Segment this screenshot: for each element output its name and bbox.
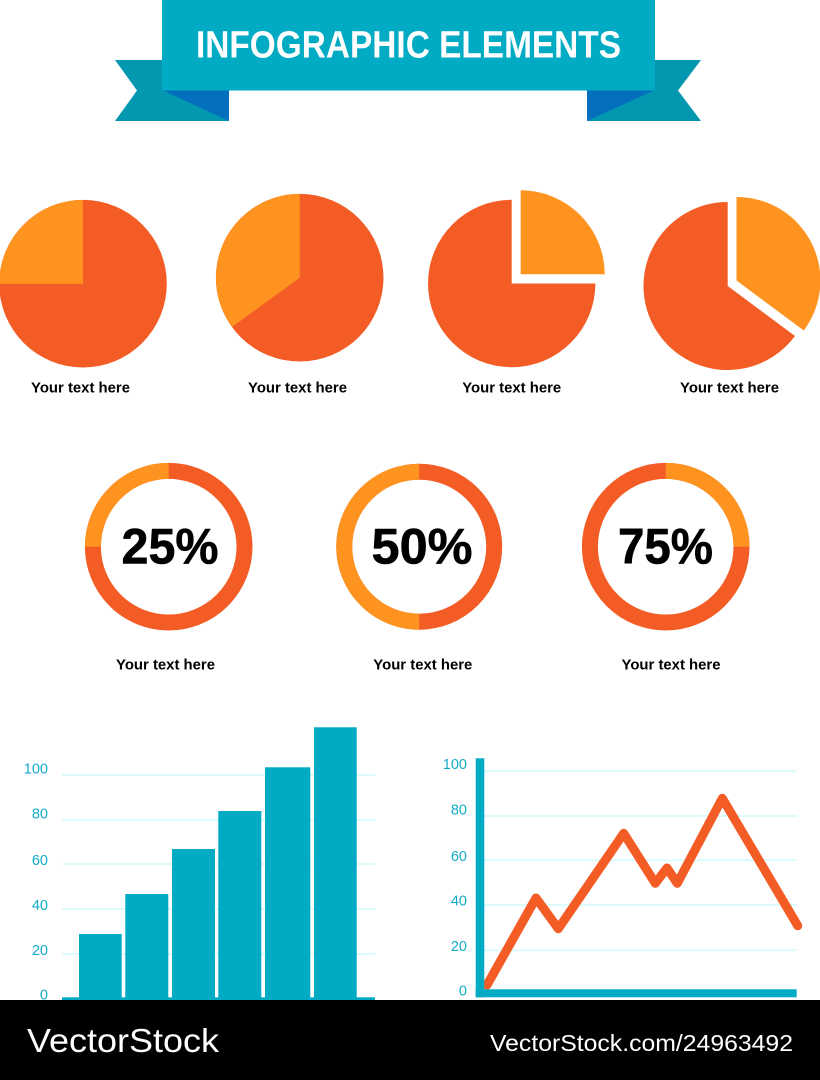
value: 50% bbox=[372, 518, 472, 574]
watermark bar: VectorStock bbox=[27, 1022, 220, 1059]
bar chart: 0 bbox=[40, 987, 48, 1003]
value: 75% bbox=[618, 518, 713, 574]
bar chart bbox=[24, 727, 375, 1003]
pie chart 1 bbox=[0, 200, 167, 396]
bar chart: 60 bbox=[32, 853, 48, 869]
caption: Your text here bbox=[373, 656, 472, 673]
caption: Your text here bbox=[462, 380, 561, 396]
donut 50% bbox=[344, 472, 494, 673]
bar chart: 100 bbox=[24, 761, 48, 777]
line chart: 80 bbox=[451, 802, 467, 818]
line chart: 100 bbox=[443, 757, 467, 773]
line chart bbox=[443, 757, 798, 1000]
line chart: 20 bbox=[451, 939, 467, 955]
watermark bar: VectorStock.com/24963492 bbox=[490, 1030, 793, 1056]
watermark bar bbox=[0, 1000, 820, 1080]
pie chart 2 bbox=[216, 194, 384, 396]
donut 75% bbox=[590, 471, 742, 673]
bar chart: 80 bbox=[32, 806, 48, 822]
line chart: 0 bbox=[459, 984, 467, 1000]
line chart: 40 bbox=[451, 894, 467, 910]
caption: Your text here bbox=[680, 380, 779, 396]
title: INFOGRAPHIC ELEMENTS bbox=[196, 24, 621, 66]
donut 25% bbox=[93, 471, 244, 673]
line chart: 60 bbox=[451, 849, 467, 865]
bar chart: 40 bbox=[32, 898, 48, 914]
caption: Your text here bbox=[116, 656, 215, 673]
title ribbon bbox=[115, 0, 701, 121]
caption: Your text here bbox=[248, 380, 347, 396]
value: 25% bbox=[122, 518, 218, 574]
pie chart 3 bbox=[428, 190, 605, 396]
pie chart 4 bbox=[644, 197, 820, 396]
caption: Your text here bbox=[31, 380, 130, 396]
caption: Your text here bbox=[622, 656, 720, 673]
bar chart: 20 bbox=[32, 943, 48, 959]
